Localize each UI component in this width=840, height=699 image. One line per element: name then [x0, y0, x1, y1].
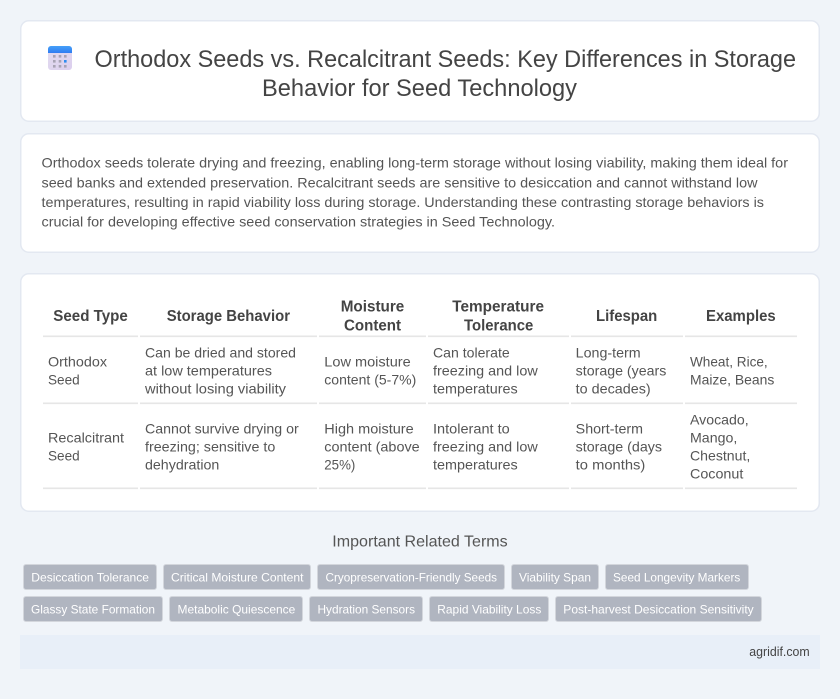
related term tags [24, 564, 762, 622]
table row: orthodox seed: Orthodox [48, 354, 107, 370]
table row: recalcitrant seed: temperatures [433, 457, 518, 473]
table row: recalcitrant seed: Coconut [690, 466, 743, 482]
table row: orthodox seed: Low moisture [324, 354, 411, 370]
footer: agridif.com [749, 645, 810, 659]
table row: recalcitrant seed: freezing; sensitive to [145, 439, 276, 455]
table row: recalcitrant seed: Avocado, [690, 412, 749, 428]
table row: recalcitrant seed: Cannot survive drying or [145, 421, 299, 437]
panel: comparison table [21, 274, 819, 511]
table header: Content [344, 318, 402, 335]
related term tags: Glassy State Formation [31, 602, 155, 616]
title: Behavior for Seed Technology [262, 75, 577, 102]
text block: summary: temperatures, resulting in rapid viability loss during storage. Understanding these contrasting storage behaviors is [42, 194, 764, 210]
table row: orthodox seed: to decades) [576, 381, 651, 397]
table row: orthodox seed: without losing viability [144, 381, 286, 397]
text block: summary: seed banks and extended preservation. Recalcitrant seeds are sensitive to desiccation and cannot withstand low [42, 174, 758, 190]
panel: title card [21, 21, 819, 121]
table row: recalcitrant seed: Chestnut, [690, 448, 750, 464]
table header: Lifespan [596, 308, 657, 325]
related term tags: Desiccation Tolerance [31, 570, 149, 584]
table header: Storage Behavior [167, 308, 290, 325]
table row: recalcitrant seed: Recalcitrant [48, 430, 124, 446]
related term tags: Post-harvest Desiccation Sensitivity [563, 602, 754, 616]
related term tags: Critical Moisture Content [171, 570, 304, 584]
table row: recalcitrant seed: content (above [324, 439, 420, 455]
table row: recalcitrant seed: Short-term [576, 421, 643, 437]
table row: orthodox seed: Can be dried and stored [145, 345, 296, 361]
table row: orthodox seed: Seed [48, 372, 80, 388]
table header: Tolerance [464, 318, 533, 335]
table header: Examples [706, 308, 776, 325]
related term tags: Seed Longevity Markers [613, 570, 740, 584]
related term tags: Metabolic Quiescence [178, 602, 296, 616]
table row: orthodox seed: storage (years [576, 363, 666, 379]
table row: recalcitrant seed: Intolerant to [433, 421, 510, 437]
panel: summary paragraph [21, 134, 819, 252]
text block: summary: Orthodox seeds tolerate drying and freezing, enabling long-term storage without losing viability, making them ideal for [42, 154, 788, 170]
table header: Seed Type [53, 308, 128, 325]
heading: important related terms: Important Related Terms [332, 534, 508, 551]
table row: recalcitrant seed: freezing and low [433, 439, 539, 455]
table row: orthodox seed: Long-term [576, 345, 641, 361]
table row: recalcitrant seed: dehydration [145, 457, 219, 473]
table row: orthodox seed: Wheat, Rice, [690, 354, 768, 370]
table header: Temperature [452, 299, 544, 316]
table row: orthodox seed: freezing and low [433, 363, 539, 379]
related term tags: Rapid Viability Loss [437, 602, 541, 616]
related term tags: Hydration Sensors [318, 602, 415, 616]
table row: recalcitrant seed: 25%) [324, 457, 355, 473]
table row: recalcitrant seed: storage (days [576, 439, 662, 455]
table row: recalcitrant seed: to months) [576, 457, 645, 473]
table header [53, 299, 776, 335]
table row: recalcitrant seed: Mango, [690, 430, 737, 446]
table row: orthodox seed: Maize, Beans [690, 372, 774, 388]
table row: orthodox seed: at low temperatures [145, 363, 272, 379]
table header: Moisture [341, 299, 404, 316]
related term tags: Cryopreservation-Friendly Seeds [326, 570, 497, 584]
title: Orthodox Seeds vs. Recalcitrant Seeds: Key Differences in Storage [94, 46, 796, 73]
table row: orthodox seed [48, 345, 774, 397]
table row: recalcitrant seed: High moisture [324, 421, 414, 437]
title [94, 46, 796, 102]
table row: orthodox seed: content (5-7%) [324, 372, 416, 388]
text block: summary [42, 154, 788, 229]
related term tags: Viability Span [519, 570, 591, 584]
table row: orthodox seed: Can tolerate [433, 345, 510, 361]
table row: orthodox seed: temperatures [433, 381, 518, 397]
icon: calendar [48, 46, 72, 70]
text block: summary: crucial for developing effective seed conservation strategies in Seed Technology. [42, 213, 555, 229]
table row: recalcitrant seed: Seed [48, 448, 80, 464]
table row: recalcitrant seed [48, 412, 750, 482]
footer [20, 635, 820, 669]
